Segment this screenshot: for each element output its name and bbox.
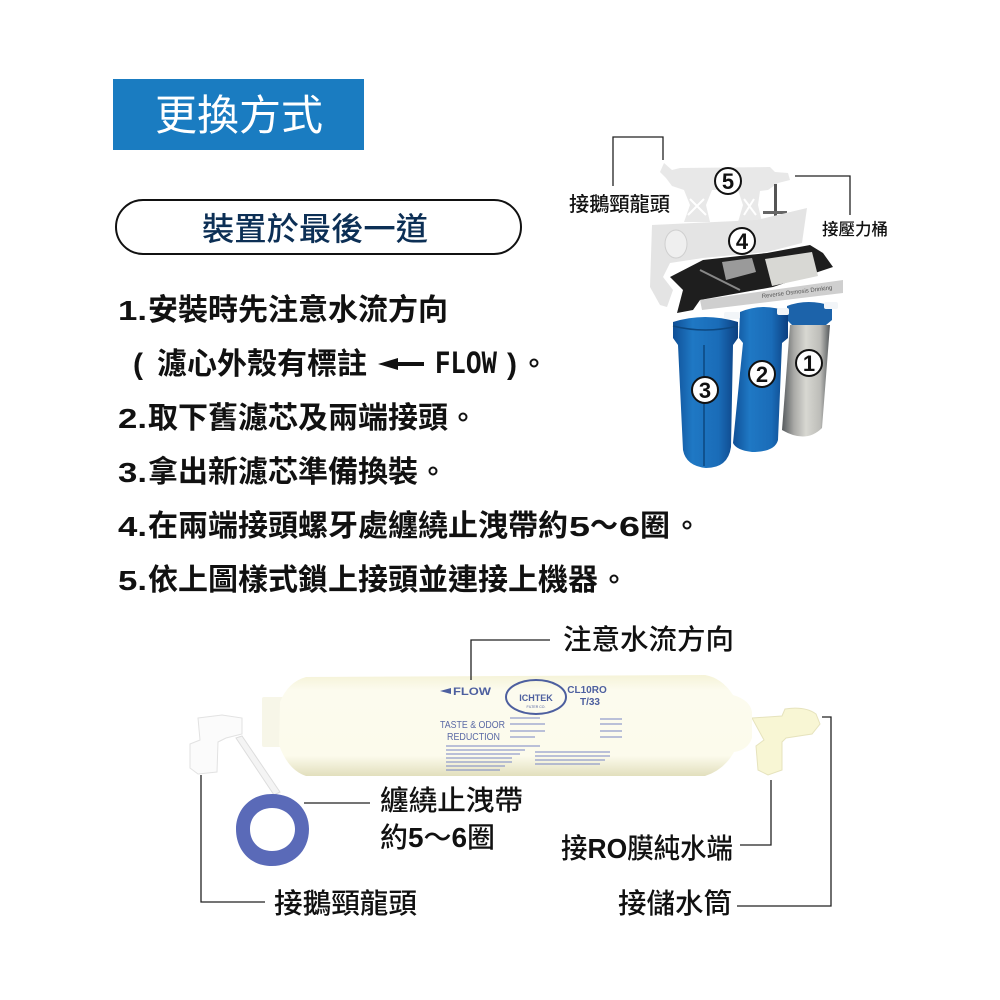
cartridge printing: REDUCTION — [447, 732, 500, 743]
mounting plate and filter 4 — [650, 208, 807, 307]
inline filter cartridge photo — [190, 675, 820, 776]
callout: water flow direction: 注意水流方向 — [563, 624, 734, 655]
callout: pressure tank: 接壓力桶 — [822, 220, 888, 239]
cartridge printing — [440, 680, 622, 770]
badge 3: 3 — [699, 378, 711, 403]
callout: seal tape: 纏繞止洩帶 — [380, 785, 523, 816]
step 1: 1. — [118, 295, 147, 326]
callout: RO membrane end — [561, 780, 771, 864]
inline filter 5 — [660, 163, 790, 222]
badge 1: 1 — [803, 351, 815, 376]
callout: gooseneck faucet (top) — [569, 137, 670, 216]
step 3: 拿出新濾芯準備換裝 — [148, 455, 418, 489]
badge 5: 5 — [722, 169, 734, 194]
brand logo — [506, 680, 566, 714]
RO purifier system photo — [650, 163, 843, 468]
brand logo: ICHTEK — [519, 693, 553, 703]
left neck — [262, 697, 284, 747]
step 4: ～ — [590, 510, 618, 543]
badge 1 — [796, 350, 822, 376]
badge 3 — [692, 377, 718, 403]
step 1 note with flow arrow — [133, 346, 538, 383]
step 4: 6 — [619, 511, 640, 542]
callout: seal tape: 約5～6圈 — [380, 822, 495, 853]
step 1 note with flow arrow: 濾心外殼有標註 — [157, 348, 367, 381]
label bar: Reverse Osmosis Drinking — [762, 285, 833, 300]
flow mark: FLOW — [453, 686, 492, 698]
callout: storage tank — [618, 717, 831, 919]
step 4: 圈 — [640, 510, 670, 543]
step 1 note with flow arrow: FLOW — [435, 346, 498, 383]
callout: gooseneck faucet (bottom) — [201, 775, 417, 919]
badge 5 — [715, 168, 741, 194]
pump and membrane — [670, 245, 833, 313]
step 1 note with flow arrow: ( — [133, 348, 143, 381]
filter 1 clear housing — [782, 302, 832, 437]
badge 2 — [749, 361, 775, 387]
brand logo: FILTER CO. — [526, 705, 546, 709]
step 4: 4. — [118, 511, 147, 542]
filter 3 blue housing — [673, 317, 738, 468]
subheading pill — [116, 200, 521, 254]
step 3: 3. — [118, 457, 147, 488]
title banner: 更換方式 — [155, 92, 323, 139]
title banner — [113, 79, 364, 150]
thread seal tape roll — [236, 736, 309, 866]
callout: water flow direction — [471, 624, 734, 680]
label bar — [700, 280, 843, 310]
fittings — [724, 302, 838, 319]
callout: storage tank: 接儲水筒 — [618, 888, 732, 919]
step 4: 5 — [569, 511, 590, 542]
step 1: 安裝時先注意水流方向 — [148, 294, 448, 327]
flow mark — [440, 686, 492, 698]
step 1 note with flow arrow: ) — [507, 348, 517, 381]
callout: pressure tank — [795, 176, 888, 239]
step 5: 依上圖樣式鎖上接頭並連接上機器 — [148, 564, 598, 597]
right fitting — [752, 708, 820, 775]
step 2: 取下舊濾芯及兩端接頭 — [148, 402, 448, 435]
model: CL10RO — [567, 685, 607, 696]
subheading pill: 裝置於最後一道 — [202, 211, 428, 247]
step 2: 2. — [118, 403, 147, 434]
cartridge printing: T/33 — [580, 697, 600, 708]
product name: TASTE & ODOR — [440, 720, 505, 731]
step 4: 在兩端接頭螺牙處纏繞止洩帶約 — [148, 510, 568, 543]
left elbow fitting — [190, 715, 242, 774]
filter 2 blue housing — [733, 307, 788, 452]
badge 4 — [729, 228, 755, 254]
small specs — [446, 718, 622, 770]
badge 2: 2 — [756, 362, 768, 387]
installation steps — [118, 294, 690, 597]
callout: gooseneck faucet (bottom): 接鵝頸龍頭 — [274, 888, 417, 919]
callout: seal tape — [304, 785, 523, 853]
cartridge body and right neck — [279, 675, 752, 776]
callout: gooseneck faucet (top): 接鵝頸龍頭 — [569, 193, 670, 216]
step 5: 5. — [118, 565, 147, 596]
badge 4: 4 — [736, 229, 749, 254]
callout: RO membrane end: 接RO膜純水端 — [561, 833, 733, 864]
